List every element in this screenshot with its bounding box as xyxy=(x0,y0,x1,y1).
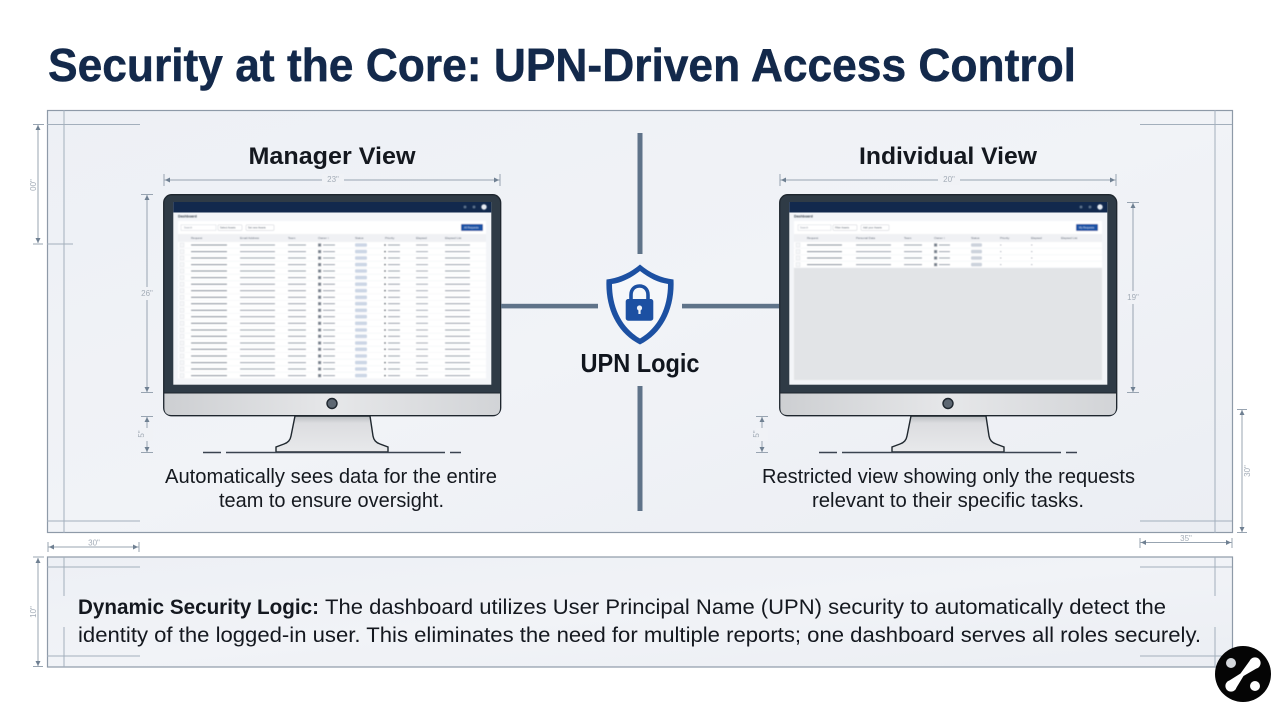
dimension: manager monitor width: 23" xyxy=(327,175,339,184)
dimension: individual monitor width: 20" xyxy=(943,175,955,184)
label: UPN Logic: UPN Logic xyxy=(580,348,700,378)
title: Security at the Core: UPN-Driven Access Control xyxy=(48,39,1076,91)
dimension: right outer xyxy=(1237,410,1252,532)
manager dashboard screen: Dashboard xyxy=(178,214,197,218)
callout text xyxy=(78,595,1201,647)
manager dashboard screen: Set new Assets xyxy=(248,226,266,230)
dimension: individual monitor height: 19" xyxy=(1127,293,1139,302)
individual dashboard screen: Request xyxy=(807,236,818,240)
icon: shield with lock xyxy=(606,264,674,344)
caption: individual view: Restricted view showing only the requests xyxy=(762,466,1135,488)
icon: individual monitor xyxy=(780,195,1117,452)
dimension: lower right width xyxy=(1140,534,1232,548)
individual dashboard screen: Elapsed List xyxy=(1061,236,1078,240)
dimension: individual stand height: 5" xyxy=(752,430,761,438)
caption: individual view xyxy=(762,466,1135,512)
dimension: manager monitor width xyxy=(164,174,500,186)
panel: dynamic security logic xyxy=(47,557,1232,667)
panel: access views xyxy=(29,110,1252,533)
caption: individual view: relevant to their specific tasks. xyxy=(812,490,1084,512)
callout text: The dashboard utilizes User Principal Name (UPN) security to automatically detect the xyxy=(325,595,1166,619)
connector lines xyxy=(501,133,779,511)
manager dashboard screen: All Requests xyxy=(464,226,479,230)
individual dashboard screen: Personal Data xyxy=(856,236,875,240)
dimension: right outer: 30" xyxy=(1243,465,1252,477)
individual dashboard screen: Elapsed xyxy=(1031,236,1042,240)
individual dashboard screen: Team xyxy=(904,236,912,240)
callout text: Dynamic Security Logic: xyxy=(78,595,319,619)
dimension: individual monitor height xyxy=(1127,202,1139,392)
dimension: individual stand height xyxy=(752,416,768,452)
manager dashboard screen: Select Assets xyxy=(220,226,236,230)
dimension: manager stand height: 5" xyxy=(137,430,146,438)
dimension: manager monitor height: 26" xyxy=(141,289,153,298)
dimension: manager stand height xyxy=(137,416,153,452)
individual dashboard screen: Filter Assets xyxy=(835,226,850,230)
dimension: left outer: 00" xyxy=(29,179,38,191)
dimension: lower right width: 35" xyxy=(1180,534,1192,543)
caption: manager view: Automatically sees data for the entire xyxy=(165,466,497,488)
dimension: lower panel height: 10" xyxy=(29,606,38,618)
individual dashboard screen: Search xyxy=(800,226,809,230)
heading: manager view: Manager View xyxy=(248,143,416,170)
caption: manager view xyxy=(165,466,497,512)
manager dashboard screen: Team xyxy=(288,236,296,240)
manager dashboard screen: Search xyxy=(184,226,193,230)
caption: manager view: team to ensure oversight. xyxy=(219,490,444,512)
manager dashboard screen: Email Address xyxy=(240,236,260,240)
icon: logo badge xyxy=(1215,646,1271,702)
manager dashboard screen: Owner ↕ xyxy=(318,236,330,240)
individual dashboard screen: Status xyxy=(971,236,980,240)
callout text: identity of the logged-in user. This eliminates the need for multiple reports; one dashboard serves all roles securely. xyxy=(78,623,1201,647)
heading: individual view: Individual View xyxy=(859,143,1038,170)
dimension: left outer xyxy=(29,124,44,244)
dimension: lower panel height xyxy=(29,557,44,666)
dimension: manager monitor height xyxy=(141,194,153,392)
manager dashboard screen: Request xyxy=(191,236,202,240)
individual dashboard screen: Priority xyxy=(1000,236,1010,240)
manager dashboard screen: Elapsed xyxy=(416,236,427,240)
manager dashboard screen: Elapsed List xyxy=(445,236,462,240)
dimension: lower left width: 30" xyxy=(88,538,100,548)
individual dashboard screen: My Requests xyxy=(1079,226,1095,230)
individual dashboard screen: Owner ↕ xyxy=(934,236,946,240)
individual dashboard screen: Add your Assets xyxy=(863,226,882,230)
individual dashboard screen xyxy=(789,202,1107,385)
individual dashboard screen: Dashboard xyxy=(794,214,813,218)
dimension: lower left width xyxy=(48,538,139,552)
icon: manager monitor xyxy=(164,195,501,452)
manager dashboard screen: Priority xyxy=(385,236,395,240)
dimension: individual monitor width xyxy=(780,174,1116,186)
manager dashboard screen: Status xyxy=(355,236,364,240)
manager dashboard screen xyxy=(173,202,491,385)
